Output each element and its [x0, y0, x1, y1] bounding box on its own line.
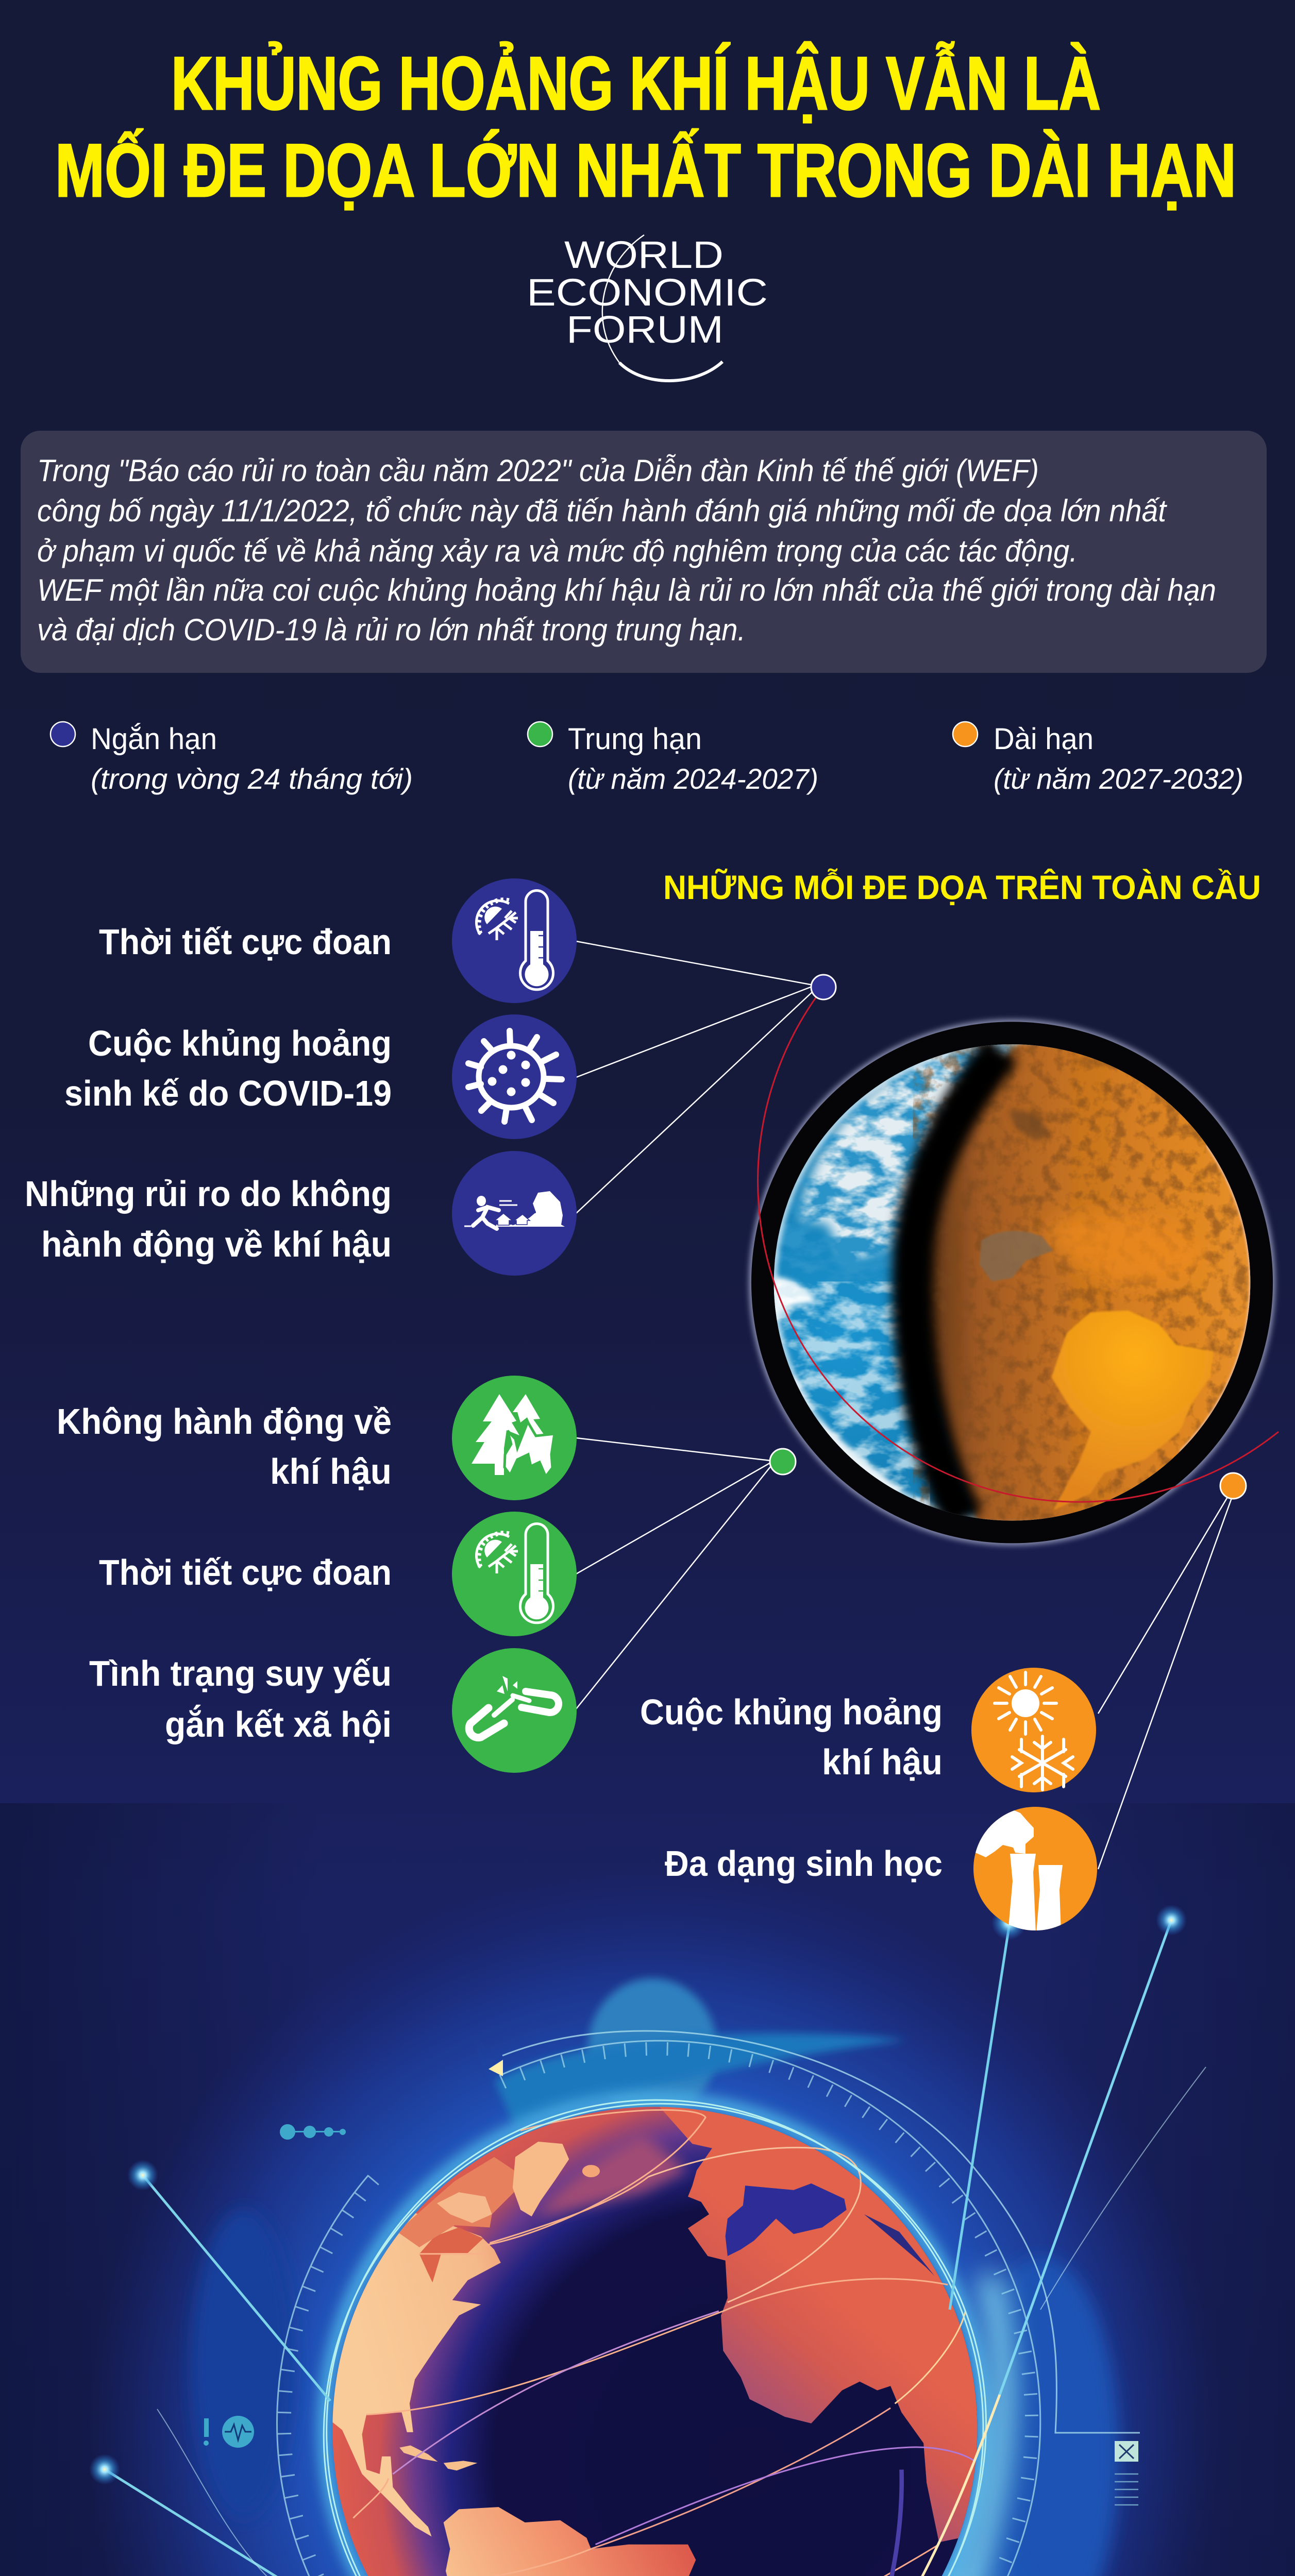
- label: social cohesion erosion: gắn kết xã hội: [165, 1704, 392, 1744]
- label: climate inaction risks: Những rủi ro do không: [25, 1174, 392, 1214]
- logo: World Economic Forum: FORUM: [566, 308, 724, 351]
- star lines: [105, 1920, 1206, 2576]
- icon: sun and snowflake: [971, 1668, 1096, 1792]
- label: climate inaction risks: hành động về khí hậu: [41, 1224, 392, 1264]
- flight arcs on globe: [353, 2110, 974, 2576]
- blue glow behind globe: [88, 1865, 1221, 2576]
- alert icon with wave: [204, 2416, 254, 2448]
- legend: short term: (trong vòng 24 tháng tới): [91, 762, 413, 795]
- label: climate inaction medium term: Không hành động về: [57, 1401, 392, 1442]
- bright rings around globe: [216, 1995, 1094, 2576]
- label: COVID livelihood crisis: Cuộc khủng hoảng: [88, 1023, 392, 1063]
- connector lines: [576, 941, 1232, 1869]
- label: extreme weather medium term: Thời tiết cực đoan: [99, 1552, 392, 1592]
- logo: World Economic Forum: [527, 233, 768, 381]
- label: climate inaction medium term: khí hậu: [270, 1451, 392, 1492]
- arrow head on ring: [489, 2060, 503, 2076]
- star lights: [89, 1905, 1187, 2485]
- label: biodiversity: Đa dạng sinh học: [665, 1843, 943, 1884]
- Europe and Africa: [660, 2107, 977, 2542]
- Mediterranean: [726, 2183, 847, 2256]
- planet outer ring: [749, 1020, 1275, 1546]
- label: extreme weather short term: Thời tiết cực đoan: [99, 922, 392, 962]
- close box with lines: [1115, 2441, 1138, 2505]
- legend: medium term: (từ năm 2024-2027): [568, 762, 818, 795]
- legend: long term: [953, 722, 1243, 795]
- label: climate inaction medium term: [57, 1401, 392, 1492]
- continents: [309, 2104, 1014, 2576]
- label: climate crisis long term: [640, 1692, 943, 1782]
- icon: virus: [452, 1014, 577, 1139]
- icon: factory chimneys: [971, 1807, 1097, 1933]
- node: long term: [1220, 1473, 1246, 1499]
- label: climate crisis long term: khí hậu: [822, 1742, 943, 1782]
- Caribbean islands: [399, 2445, 477, 2470]
- panel: intro text: công bố ngày 11/1/2022, tổ chức này đã tiến hành đánh giá những mối đe dọa lớn nhất: [37, 494, 1167, 528]
- panel: intro text: WEF một lần nữa coi cuộc khủng hoảng khí hậu là rủi ro lớn nhất của thế giới trong dài hạn: [37, 573, 1216, 607]
- globe in zoomed coordinates: [309, 2086, 1033, 2576]
- panel: intro text: và đại dịch COVID-19 là rủi ro lớn nhất trong trung hạn.: [37, 613, 746, 647]
- label: social cohesion erosion: Tình trạng suy yếu: [89, 1653, 392, 1693]
- legend: medium term: Trung hạn: [568, 722, 702, 756]
- label: climate inaction risks: [25, 1174, 392, 1264]
- planet surface: [769, 1039, 1262, 1528]
- icon: extreme weather green: [452, 1512, 577, 1636]
- South America: [444, 2507, 696, 2576]
- limb glow: [326, 2100, 1026, 2576]
- logo: World Economic Forum: WORLD: [564, 233, 724, 276]
- node: short term: [811, 975, 836, 999]
- background blobs: [192, 1978, 1118, 2576]
- icon: forest fire: [452, 1376, 577, 1500]
- icon: extreme weather blue: [452, 878, 577, 1003]
- lower illustration: globe and network lines: [0, 1803, 1295, 2576]
- icon: broken chain: [452, 1648, 577, 1773]
- label: social cohesion erosion: [89, 1653, 392, 1744]
- globe ocean: [332, 2107, 977, 2576]
- icon: runner fleeing wave: [452, 1151, 577, 1276]
- Arctic islands and Greenland: [397, 2157, 514, 2247]
- northern purple shade: [538, 2135, 688, 2216]
- logo: World Economic Forum: ECONOMIC: [527, 271, 768, 314]
- label: climate crisis long term: Cuộc khủng hoảng: [640, 1692, 943, 1732]
- Red Sea: [864, 2214, 935, 2276]
- dot row: [280, 2124, 346, 2140]
- legend: short term: [51, 722, 413, 795]
- North and Central America: [309, 2206, 501, 2536]
- legend: short term: Ngắn hạn: [91, 722, 217, 756]
- section heading: NHỮNG MỖI ĐE DỌA TRÊN TOÀN CẦU: [663, 868, 1261, 906]
- panel: intro text: Trong "Báo cáo rủi ro toàn cầu năm 2022" của Diễn đàn Kinh tế thế giới (WEF): [37, 453, 1039, 488]
- panel: intro text: [21, 431, 1267, 673]
- tick ring around globe: [277, 2031, 1140, 2576]
- legend: long term: (từ năm 2027-2032): [994, 762, 1243, 795]
- node: medium term: [770, 1449, 796, 1475]
- legend: long term: Dài hạn: [994, 722, 1094, 756]
- legend: medium term: [528, 722, 818, 795]
- label: COVID livelihood crisis: sinh kế do COVID-19: [64, 1073, 392, 1113]
- red orbit arc: [758, 987, 1279, 1502]
- panel: intro text: ở phạm vi quốc tế về khả năng xảy ra và mức độ nghiêm trọng của các tác động.: [37, 534, 1078, 568]
- planet earth half blue half orange: [749, 1020, 1275, 1546]
- title: [55, 41, 1236, 212]
- label: COVID livelihood crisis: [64, 1023, 392, 1113]
- Hudson Bay: [419, 2227, 483, 2282]
